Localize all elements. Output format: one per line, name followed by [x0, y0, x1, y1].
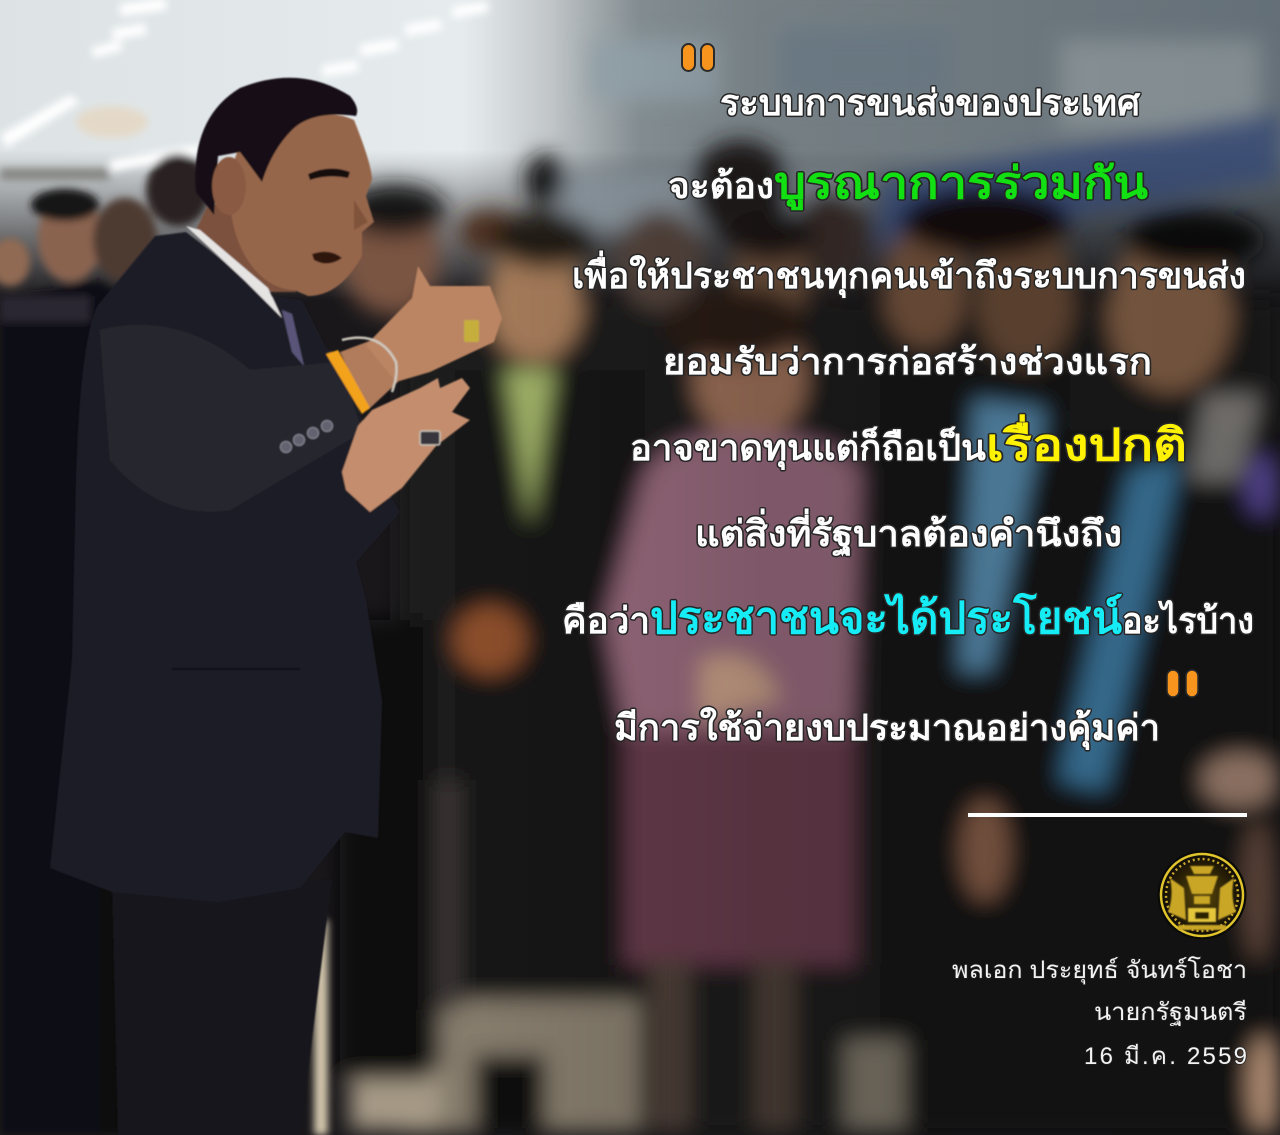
mid crowd base: [400, 300, 1280, 1135]
quote line 2 with green highlight: บูรณาการร่วมกัน: [774, 159, 1148, 210]
attribution: name, title, date: พลเอก ประยุทธ์ จันทร์โอชา: [952, 956, 1247, 985]
attribution: name, title, date: 16 มี.ค. 2559: [1084, 1043, 1247, 1070]
group of men centre right: [883, 223, 967, 347]
nose shadow: [354, 200, 368, 230]
hair: [195, 78, 357, 215]
quote line 6: แต่สิ่งที่รัฐบาลต้องคำนึงถึง: [695, 508, 1122, 557]
neck: [195, 200, 296, 292]
floor: [440, 1000, 640, 1130]
quote line 3: เพื่อให้ประชาชนทุกคนเข้าถึงระบบการขนส่ง: [572, 250, 1246, 299]
opening quote mark: [682, 44, 714, 71]
sleeve buttons: [280, 420, 332, 452]
orange wristband: [326, 350, 370, 414]
mouth: [312, 252, 342, 264]
quote line 7 with cyan highlight: คือว่า: [562, 600, 650, 641]
right men: [880, 370, 1070, 1135]
man with glasses: [340, 195, 440, 315]
quote line 4: ยอมรับว่าการก่อสร้างช่วงแรก: [663, 341, 1152, 382]
quote line 8: มีการใช้จ่ายงบประมาณอย่างคุ้มค่า: [614, 706, 1160, 751]
quote line 2 with green highlight: [668, 159, 1148, 210]
quote line 5 with yellow highlight: อาจขาดทุนแต่ก็ถือเป็น: [630, 425, 986, 471]
closing quote mark: [1167, 670, 1198, 697]
trousers: [112, 880, 332, 1135]
quote line 5 with yellow highlight: [630, 414, 1187, 471]
upper hand: [366, 266, 502, 382]
quote line 7 with cyan highlight: ประชาชนจะได้ประโยชน์: [650, 591, 1122, 643]
face: [254, 114, 374, 296]
quote line 7 with cyan highlight: [562, 591, 1254, 643]
sleeve highlight: [100, 325, 362, 511]
upper right wall panels: [590, 40, 720, 100]
quote line 7 with cyan highlight: อะไรบ้าง: [1122, 599, 1254, 641]
sharper crowd at left: [0, 0, 489, 1135]
woman: [694, 320, 806, 440]
attribution: name, title, date: [952, 956, 1247, 1070]
photo subject: man in dark suit gesturing: [50, 78, 502, 1135]
quote line 5 with yellow highlight: เรื่องปกติ: [986, 414, 1187, 470]
eyebrow: [308, 168, 350, 180]
ear: [212, 157, 246, 215]
gold ring: [464, 320, 479, 342]
wrist upper: [340, 334, 400, 410]
attribution: name, title, date: นายกรัฐมนตรี: [1094, 999, 1247, 1026]
divider: [968, 813, 1247, 817]
pocket: [172, 668, 300, 670]
quote line 2 with green highlight: จะต้อง: [668, 165, 774, 206]
head base: [230, 100, 360, 290]
silver bangle: [342, 338, 396, 392]
icon: Thai government seal: [1158, 850, 1246, 940]
suit jacket: [50, 232, 400, 902]
collar and tie: [186, 226, 282, 318]
lower hand: [342, 378, 470, 512]
quote line 1: ระบบการขนส่งของประเทศ: [720, 82, 1141, 123]
dark wash over the right side: [480, 0, 1280, 1135]
jewelled ring: [420, 431, 440, 445]
